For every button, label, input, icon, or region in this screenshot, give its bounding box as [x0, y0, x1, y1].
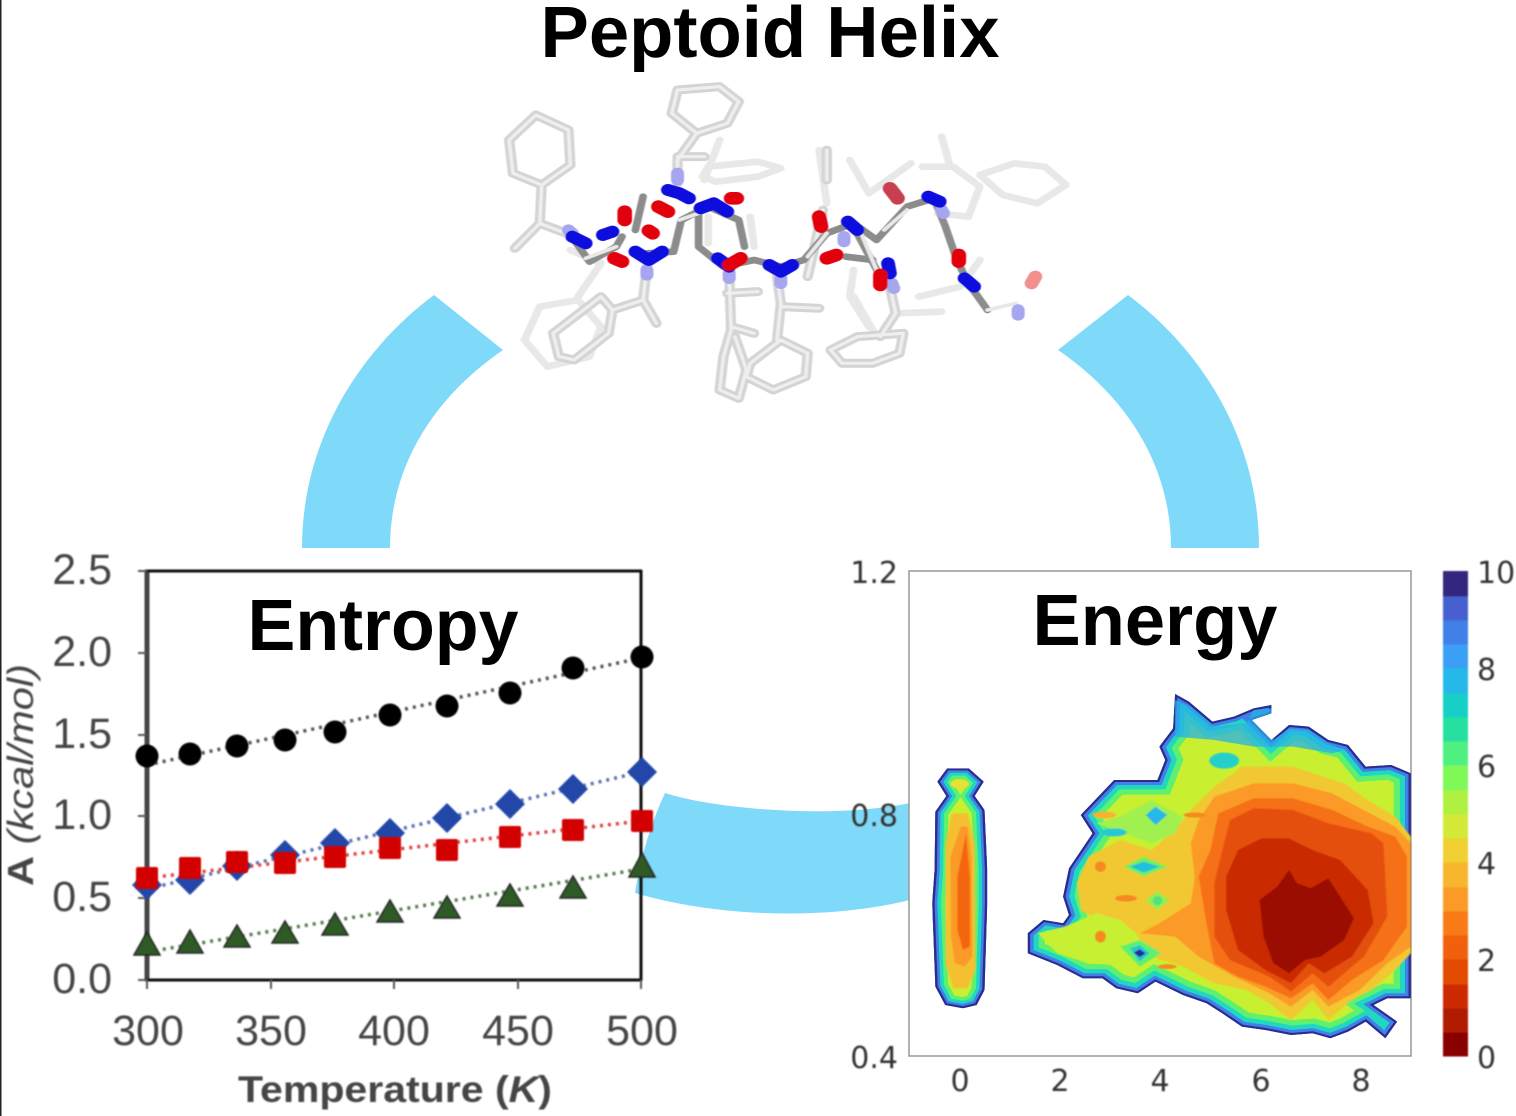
colorbar tick labels: 0	[1477, 1041, 1496, 1076]
entropy y axis tick labels	[52, 546, 112, 1003]
contour map	[932, 694, 1411, 1038]
colorbar tick labels: 4	[1477, 847, 1496, 882]
contour y axis tick labels: 0.4	[850, 1041, 898, 1076]
colorbar	[1443, 571, 1468, 1056]
heading: Energy: Energy	[1032, 581, 1278, 661]
entropy x axis tick labels	[112, 1007, 678, 1055]
contour x axis tick labels	[950, 1064, 1371, 1099]
contour: narrow left basin	[932, 768, 987, 1008]
contour plot background and frame	[909, 571, 1411, 1056]
colorbar tick labels: 2	[1477, 944, 1496, 979]
panel: energy contour plot	[850, 556, 1515, 1099]
entropy y axis tick labels: 0.5	[52, 873, 112, 921]
heading: Entropy: Entropy	[248, 586, 518, 666]
colorbar tick labels: 8	[1477, 653, 1496, 688]
colorbar tick labels	[1477, 556, 1515, 1076]
entropy x axis tick labels: 300	[112, 1007, 184, 1055]
scatter plot axes frame	[138, 570, 642, 989]
arrow arc: left, entropy to helix	[302, 295, 503, 548]
entropy x axis tick labels: 400	[358, 1007, 430, 1055]
entropy y axis tick labels: 0.0	[52, 955, 112, 1003]
entropy x axis tick labels: 500	[606, 1007, 678, 1055]
entropy y axis tick labels: 2.5	[52, 546, 112, 594]
contour y axis tick labels: 0.8	[850, 799, 898, 834]
colorbar tick labels: 10	[1477, 556, 1515, 591]
contour x axis tick labels: 2	[1050, 1064, 1070, 1099]
entropy x axis title: Temperature ( K)	[238, 1069, 552, 1110]
contour x axis tick labels: 8	[1351, 1064, 1371, 1099]
entropy x axis tick labels: 450	[482, 1007, 554, 1055]
arrow arc: bottom, entropy to energy	[635, 793, 910, 914]
series: black circles	[136, 646, 654, 768]
left edge line	[0, 0, 2, 1116]
contour: main basin	[1028, 694, 1411, 1038]
entropy y axis title: A (kcal/mol)	[0, 664, 41, 886]
molecule: peptoid helix stick model	[509, 87, 1066, 398]
entropy y axis tick labels: 1.5	[52, 710, 112, 758]
arrow arc: right, energy to helix	[1058, 295, 1259, 548]
contour y axis tick labels: 1.2	[850, 556, 898, 591]
panel: entropy chart	[0, 546, 678, 1110]
contour y axis tick labels	[850, 556, 898, 1076]
contour x axis tick labels: 4	[1150, 1064, 1170, 1099]
colorbar tick labels: 6	[1477, 750, 1496, 785]
contour x axis tick labels: 6	[1251, 1064, 1271, 1099]
series: blue diamonds	[132, 757, 657, 900]
entropy y axis tick labels: 1.0	[52, 791, 112, 839]
contour x axis tick labels: 0	[950, 1064, 970, 1099]
series: green triangles	[134, 853, 655, 955]
entropy y axis tick labels: 2.0	[52, 628, 112, 676]
entropy x axis tick labels: 350	[235, 1007, 307, 1055]
series: red squares	[136, 810, 653, 889]
